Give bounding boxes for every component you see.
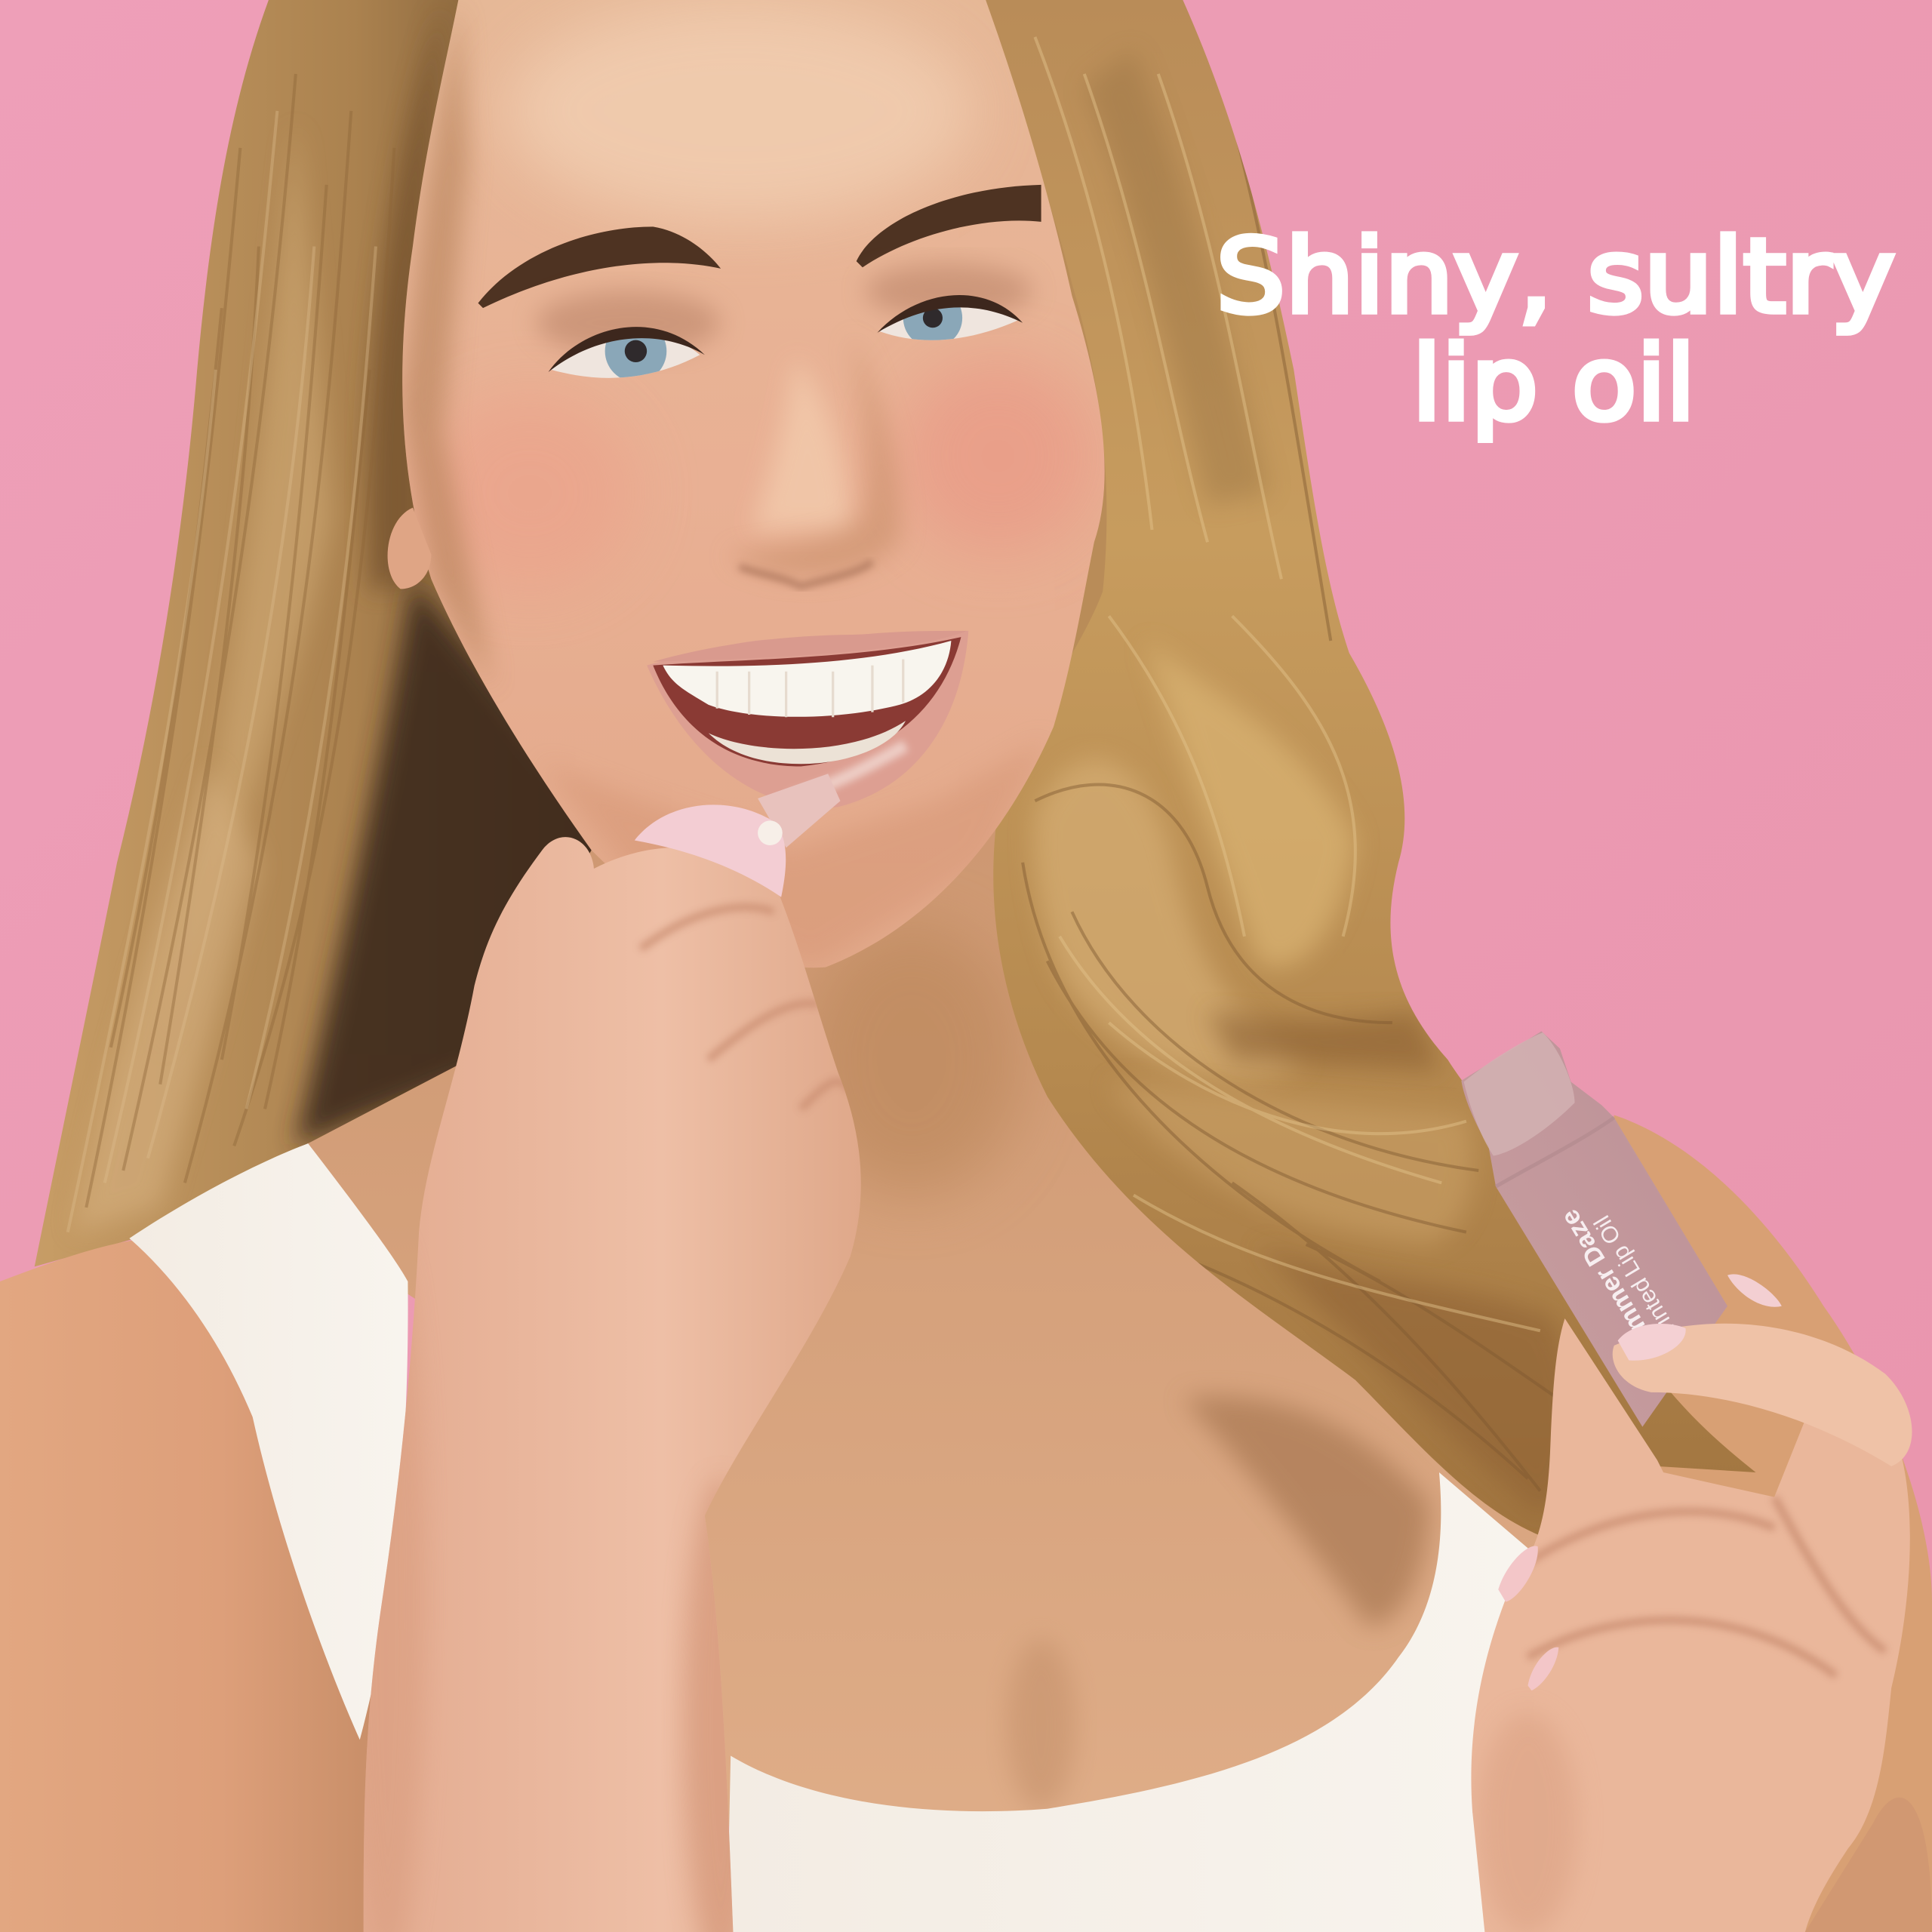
headline (1216, 217, 1895, 443)
hair: back left mass (35, 0, 641, 1266)
right hand (1471, 1318, 1932, 1932)
fingers over bottle (1498, 1274, 1912, 1690)
right eyebrow (857, 185, 1041, 267)
headline: Shiny, sultry (1216, 217, 1895, 336)
wand (758, 774, 840, 848)
left shoulder (0, 1238, 419, 1932)
teeth (663, 641, 951, 717)
nose (727, 333, 900, 586)
left eye (536, 291, 721, 382)
hair: underlay behind temple (986, 0, 1183, 863)
bottle body (1461, 1032, 1727, 1427)
ear (388, 508, 431, 589)
mouth (647, 631, 968, 808)
nail: index (1727, 1274, 1782, 1307)
headline: lip oil (1412, 324, 1696, 443)
bottle label: product: Tinted Lip Oil (1589, 1211, 1682, 1342)
nail: middle (1498, 1546, 1538, 1601)
left eyebrow (478, 226, 721, 308)
right shoulder and back arm (1540, 1115, 1932, 1932)
cap (635, 804, 786, 897)
product bottle (1461, 1032, 1727, 1427)
nail: ring (1527, 1647, 1558, 1690)
hair: front right wave (986, 0, 1756, 1540)
neck and chest (308, 740, 1571, 1848)
bottle label: brand: Summer Daze (1555, 1204, 1668, 1366)
dress neckline panel (727, 1472, 1540, 1932)
right eye (865, 263, 1032, 347)
white dress with strap (129, 1143, 1540, 1932)
face (388, 0, 1105, 968)
left hand and forearm (351, 837, 861, 1932)
applicator (635, 774, 840, 897)
dress strap (129, 1143, 408, 1740)
nail: thumb (1618, 1324, 1686, 1361)
